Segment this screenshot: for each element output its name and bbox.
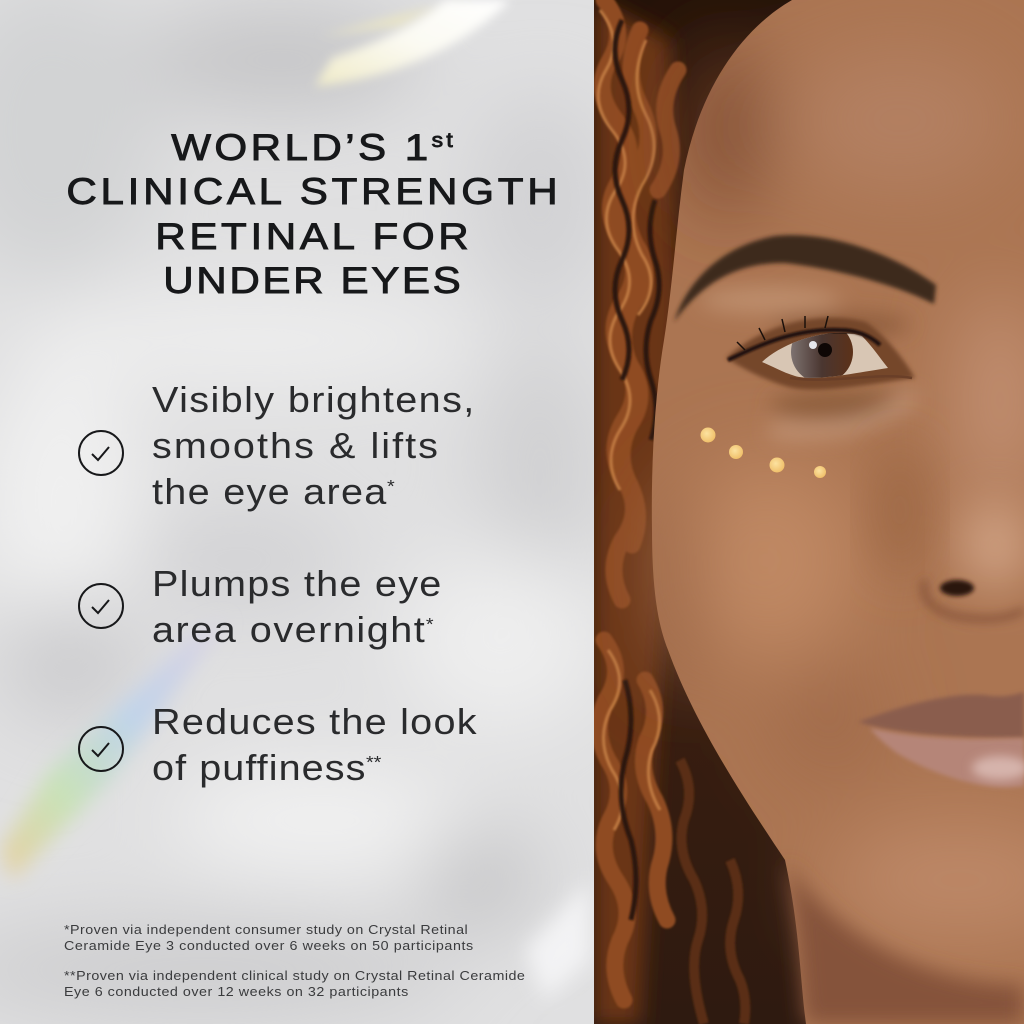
face skin — [652, 0, 1024, 1024]
title — [66, 127, 558, 301]
serum dots — [700, 428, 826, 478]
benefit 2 — [79, 565, 441, 651]
benefit 1 — [79, 381, 474, 513]
title: CLINICAL STRENGTH — [66, 171, 558, 212]
title: WORLD’S 1 — [171, 127, 428, 168]
benefit 3 text: Reduces the look — [152, 703, 477, 743]
title: UNDER EYES — [163, 260, 461, 301]
benefit 1 text: Visibly brightens, — [152, 381, 474, 421]
footnotes: Ceramide Eye 3 conducted over 6 weeks on 50 participants — [64, 939, 473, 953]
icon: check circle 3 — [79, 727, 123, 771]
benefit 2 text — [152, 565, 441, 651]
title: RETINAL FOR — [155, 216, 469, 257]
benefit 3 text: of puffiness — [152, 749, 365, 789]
benefit 1 text — [152, 381, 474, 513]
benefit 2 text: area overnight — [152, 611, 425, 651]
icon: check circle 2 — [79, 584, 123, 628]
hair — [594, 0, 745, 1024]
benefit 1 text: * — [387, 477, 395, 497]
title: st — [432, 129, 453, 152]
benefit 3 text — [152, 703, 477, 789]
eye socket — [700, 286, 915, 432]
nose — [870, 471, 1024, 625]
benefit 1 text: the eye area — [152, 473, 387, 513]
benefit 3 — [79, 703, 477, 789]
footnotes: **Proven via independent clinical study on Crystal Retinal Ceramide — [64, 969, 525, 983]
neck shadow — [786, 862, 1024, 1024]
footnotes — [64, 923, 525, 999]
eye — [726, 316, 915, 390]
panel: portrait photo — [594, 0, 1024, 1024]
footnotes: *Proven via independent consumer study on Crystal Retinal — [64, 923, 468, 937]
benefit 2 text: Plumps the eye — [152, 565, 441, 605]
icon: check circle 1 — [79, 431, 123, 475]
benefit 2 text: * — [426, 615, 434, 635]
lips — [858, 692, 1024, 787]
benefit 1 text: smooths & lifts — [152, 427, 438, 467]
footnotes: Eye 6 conducted over 12 weeks on 32 participants — [64, 985, 408, 999]
eyebrow — [674, 235, 936, 322]
panel: frosted background — [0, 0, 610, 1024]
benefit 3 text: ** — [366, 753, 382, 773]
